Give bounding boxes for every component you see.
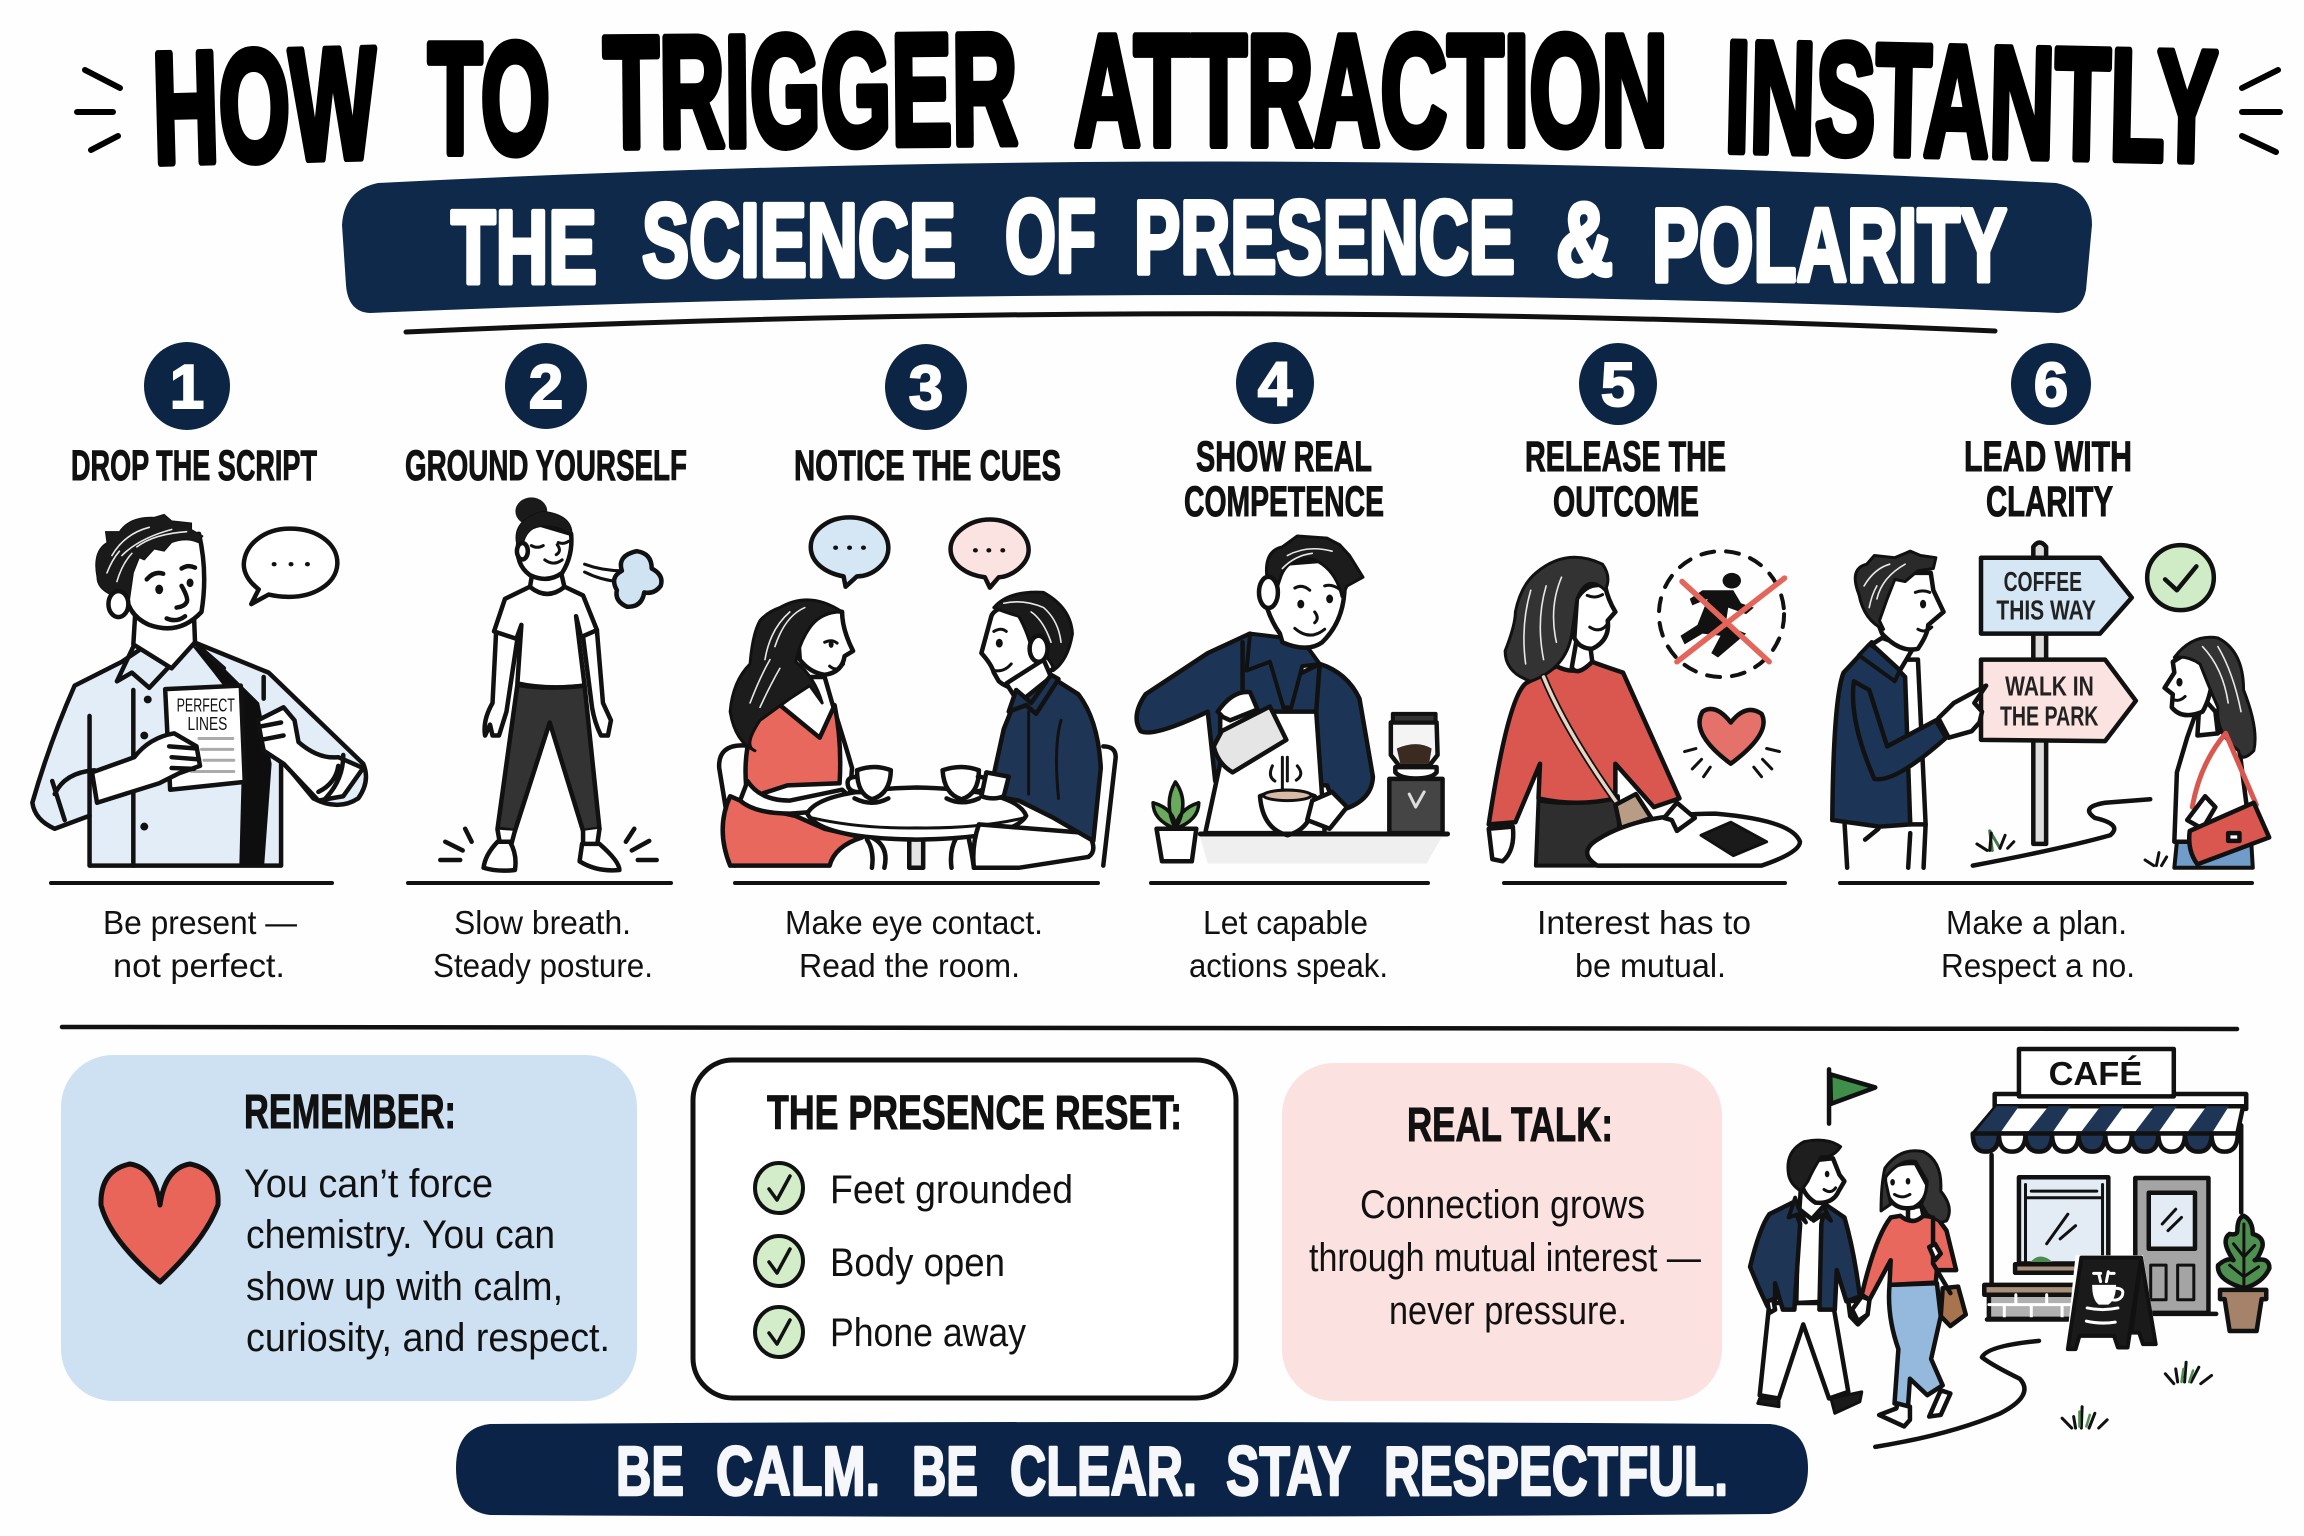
paper: perfect lines: PERFECT bbox=[177, 696, 235, 716]
step 4 caption: Let capable bbox=[1203, 904, 1368, 941]
step 3 illustration: couple at cafe table bbox=[719, 517, 1116, 868]
icon: left title sparks bbox=[77, 70, 120, 150]
step 5 heading bbox=[1525, 433, 1726, 526]
step 2 number bbox=[505, 343, 587, 429]
table bbox=[807, 788, 1026, 868]
step 5 caption: be mutual. bbox=[1575, 947, 1726, 984]
footer banner: CALM. bbox=[716, 1432, 880, 1510]
remember text: You can’t force bbox=[244, 1162, 493, 1206]
remember text: chemistry. You can bbox=[246, 1213, 555, 1257]
panel: the presence reset bbox=[693, 1060, 1236, 1398]
step 6 caption bbox=[1941, 904, 2135, 984]
step 1 number bbox=[144, 342, 230, 430]
step 6 heading: CLARITY bbox=[1986, 478, 2113, 526]
step 6 caption: Respect a no. bbox=[1941, 947, 2135, 984]
step 3 number: 3 bbox=[909, 354, 943, 423]
step 5 heading: RELEASE THE bbox=[1525, 433, 1726, 481]
step 6 number bbox=[2011, 343, 2091, 425]
footer banner: CLEAR. bbox=[1010, 1432, 1197, 1510]
check badge bbox=[2147, 545, 2214, 610]
paper: perfect lines bbox=[165, 686, 245, 790]
panel: remember bbox=[61, 1055, 637, 1401]
step 2 illustration: breathing woman bbox=[440, 497, 661, 871]
scene: couple walking to cafe bbox=[1750, 1049, 2269, 1447]
title: HOW bbox=[150, 15, 379, 197]
check: feet grounded: Feet grounded bbox=[830, 1168, 1073, 1212]
bubble: pink bbox=[951, 520, 1029, 588]
woman bbox=[2165, 637, 2269, 868]
man bbox=[973, 592, 1101, 868]
step 2 caption: Steady posture. bbox=[433, 947, 653, 984]
subtitle banner: & bbox=[1556, 182, 1613, 298]
step 1 baseline bbox=[51, 881, 332, 885]
grinder bbox=[1389, 714, 1443, 833]
step 3 heading: NOTICE THE CUES bbox=[794, 442, 1061, 490]
step 4 caption: actions speak. bbox=[1189, 947, 1388, 984]
step 3 number bbox=[885, 344, 967, 430]
paper: perfect lines: LINES bbox=[188, 714, 227, 735]
step 2 caption bbox=[433, 904, 653, 984]
step 3 caption: Read the room. bbox=[799, 947, 1020, 984]
icon: heart bbox=[101, 1164, 218, 1282]
check: body open: Body open bbox=[830, 1241, 1005, 1285]
step 2 number: 2 bbox=[529, 353, 563, 422]
step 6 caption: Make a plan. bbox=[1946, 904, 2127, 941]
man bbox=[1832, 551, 1986, 868]
icon: right title sparks bbox=[2242, 70, 2280, 152]
footer banner: STAY bbox=[1226, 1432, 1351, 1510]
step 4 caption bbox=[1189, 904, 1388, 984]
real talk text bbox=[1309, 1183, 1701, 1333]
heart bbox=[1685, 709, 1779, 777]
step 3 baseline bbox=[735, 881, 1098, 885]
remember text bbox=[244, 1162, 610, 1360]
step 2 heading: GROUND YOURSELF bbox=[405, 442, 687, 490]
speech bubble bbox=[244, 529, 337, 604]
subtitle banner: POLARITY bbox=[1652, 188, 2007, 304]
check: phone away: Phone away bbox=[830, 1311, 1026, 1355]
plant bbox=[1153, 782, 1199, 861]
panel: real talk bbox=[1282, 1063, 1722, 1401]
step 6 heading: LEAD WITH bbox=[1964, 433, 2132, 481]
subtitle banner: OF bbox=[1005, 179, 1096, 295]
a-frame chalkboard bbox=[2066, 1255, 2158, 1349]
step 3 caption: Make eye contact. bbox=[785, 904, 1043, 941]
step 1 illustration: man with script bbox=[32, 514, 366, 866]
step 6 illustration: man pointing at signpost bbox=[1832, 543, 2269, 868]
presence reset heading: THE PRESENCE RESET: bbox=[767, 1087, 1182, 1140]
remember text: curiosity, and respect. bbox=[246, 1316, 610, 1360]
step 4 baseline bbox=[1151, 881, 1428, 885]
check: phone away bbox=[755, 1307, 1026, 1357]
step 1 caption: Be present — bbox=[103, 904, 297, 941]
check: body open bbox=[755, 1236, 1005, 1286]
step 5 heading: OUTCOME bbox=[1553, 478, 1699, 526]
step 4 number bbox=[1236, 342, 1314, 424]
real talk text: through mutual interest — bbox=[1309, 1236, 1701, 1280]
footer banner: RESPECTFUL. bbox=[1384, 1432, 1728, 1510]
cafe storefront: CAFÉ bbox=[2049, 1055, 2142, 1092]
step 4 heading: COMPETENCE bbox=[1184, 478, 1384, 526]
real talk text: Connection grows bbox=[1360, 1183, 1645, 1227]
remember heading: REMEMBER: bbox=[244, 1086, 456, 1139]
real talk text: never pressure. bbox=[1389, 1289, 1627, 1333]
step 5 caption bbox=[1537, 904, 1751, 984]
title: TRIGGER bbox=[603, 1, 1018, 181]
step 6 illustration: man pointing at signpost: THE PARK bbox=[2000, 701, 2098, 732]
step 6 illustration: man pointing at signpost: COFFEE bbox=[2004, 566, 2082, 597]
step 1 caption: not perfect. bbox=[113, 947, 285, 984]
footer banner: BE bbox=[912, 1432, 978, 1510]
title bbox=[150, 1, 2219, 197]
step 6 number: 6 bbox=[2034, 351, 2068, 420]
step 2 caption: Slow breath. bbox=[454, 904, 631, 941]
walking path bbox=[1875, 1341, 2039, 1447]
step 2 baseline bbox=[408, 881, 671, 885]
phone bbox=[1701, 822, 1767, 856]
milk pitcher bbox=[1214, 706, 1286, 772]
step 5 baseline bbox=[1504, 881, 1785, 885]
cafe storefront bbox=[1973, 1049, 2269, 1349]
footer banner: BE bbox=[616, 1432, 684, 1510]
step 4 illustration: barista bbox=[1137, 536, 1448, 863]
subtitle banner: SCIENCE bbox=[642, 183, 956, 299]
step 5 caption: Interest has to bbox=[1537, 904, 1751, 941]
coffee cup and steam bbox=[1260, 757, 1347, 835]
woman walking bbox=[1852, 1151, 1966, 1426]
crossed-out chase icon bbox=[1659, 551, 1785, 677]
bubble: blue bbox=[811, 517, 888, 587]
cups bbox=[848, 767, 891, 799]
step 5 illustration: woman letting go bbox=[1489, 551, 1800, 866]
subtitle banner: THE bbox=[451, 190, 597, 306]
title: ATTRACTION bbox=[1074, 3, 1668, 179]
step 1 caption bbox=[103, 904, 297, 984]
subtitle banner bbox=[342, 162, 2092, 313]
step 1 heading: DROP THE SCRIPT bbox=[71, 442, 317, 490]
step 4 heading: SHOW REAL bbox=[1196, 433, 1372, 481]
step 5 number bbox=[1579, 343, 1657, 425]
step 6 illustration: man pointing at signpost: WALK IN bbox=[2005, 671, 2094, 702]
check: feet grounded bbox=[755, 1163, 1073, 1213]
step 4 heading bbox=[1184, 433, 1384, 526]
step 6 heading bbox=[1964, 433, 2132, 526]
step 6 illustration: man pointing at signpost: THIS WAY bbox=[1996, 595, 2096, 626]
flag bbox=[1829, 1069, 1875, 1124]
potted plant bbox=[2218, 1216, 2269, 1331]
grass bbox=[1977, 831, 2167, 866]
title: TO bbox=[428, 11, 550, 187]
step 4 number: 4 bbox=[1258, 350, 1293, 419]
step 1 number: 1 bbox=[170, 353, 204, 422]
remember text: show up with calm, bbox=[246, 1265, 563, 1309]
grass tufts bbox=[2062, 1362, 2212, 1428]
real talk heading: REAL TALK: bbox=[1407, 1099, 1613, 1152]
step 6 baseline bbox=[1840, 881, 2252, 885]
step 3 caption bbox=[785, 904, 1043, 984]
step 5 number: 5 bbox=[1601, 351, 1635, 420]
man walking bbox=[1750, 1140, 1868, 1413]
footer banner bbox=[456, 1422, 1808, 1517]
subtitle banner: PRESENCE bbox=[1134, 180, 1515, 296]
